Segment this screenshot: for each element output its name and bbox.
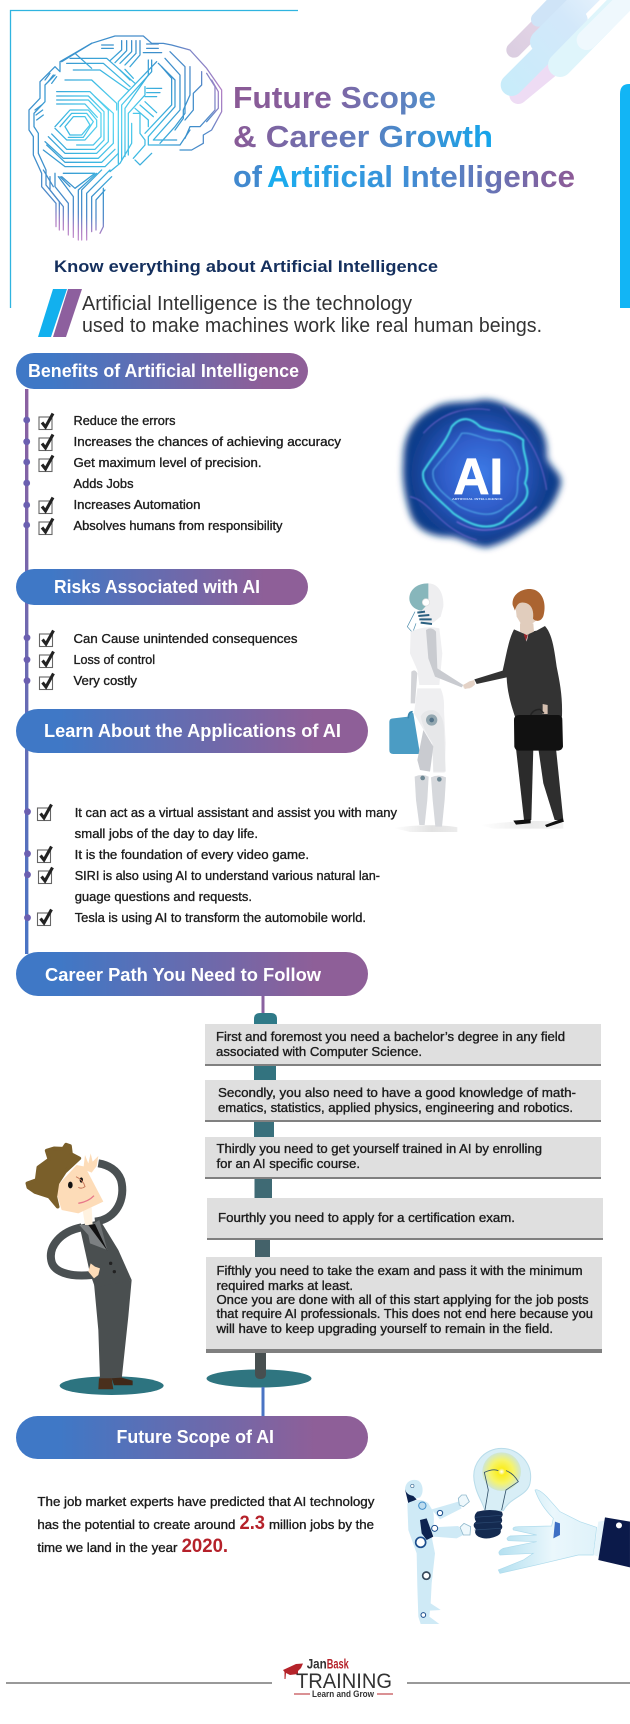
heading: benefits: Benefits of Artificial Intelligence [28,360,299,381]
timeline vertical line [25,389,28,954]
step 3 box: for an AI specific course. [216,1157,360,1171]
step 5 box: that require AI professionals. This does not end here because you [216,1307,593,1321]
light bulb [474,1448,531,1539]
heading: risks [16,569,308,605]
connector: career heading to pole [262,996,264,1014]
panel: applications list: It is the foundation of every video game. [75,847,309,862]
title line 1: Future Scope [233,81,436,115]
logo: JanBask Training: Learn and Grow [312,1689,375,1700]
logo: JanBask Training [283,1657,393,1700]
subtitle: Know everything about Artificial Intelligence [54,257,438,276]
hand [498,1490,630,1573]
stat: 2020: 2020. [182,1535,228,1557]
businessman [463,589,564,827]
panel: risks list: Very costly [74,673,138,688]
icon: circuit brain [29,36,222,240]
signpost base [206,1370,312,1388]
panel: applications list: Tesla is using AI to transform the automobile world. [75,910,366,925]
title line 3 highlight: Artificial Intelligence [267,160,575,194]
step 5 box [206,1257,602,1353]
robot [405,1480,471,1624]
future scope text block: million jobs by the [269,1517,374,1532]
signpost pole [254,1013,277,1379]
shadow right [480,821,563,829]
logo: JanBask Training: Bask [327,1657,349,1672]
intro text: Artificial Intelligence is the technology [82,293,412,315]
step 2 box: Secondly, you also need to have a good knowledge of math- [218,1086,576,1100]
decorative frame: top and left line [10,10,298,308]
panel: benefits list: Absolves humans from responsibility [74,518,283,533]
step 2 box: ematics, statistics, applied physics, engineering and robotics. [218,1101,573,1115]
heading: applications: Learn About the Applications of AI [44,720,341,741]
intro text: used to make machines work like real human beings. [82,315,542,337]
top-right pastel stripes [512,0,630,95]
step 1 box: First and foremost you need a bachelor’s degree in any field [216,1030,565,1044]
step 5 box: Fifthly you need to take the exam and pass it with the minimum [216,1264,582,1278]
future scope text block: has the potential to create around [37,1517,235,1532]
logo: JanBask Training: Jan [307,1657,327,1672]
title [233,81,575,194]
panel: benefits list: Increases the chances of achieving accuracy [74,434,342,449]
heading: risks: Risks Associated with AI [54,576,260,597]
robot [389,583,474,827]
icon: graduation cap [283,1664,303,1679]
panel: benefits list: Reduce the errors [74,413,176,428]
title line 3: of [233,160,263,194]
panel: risks list: Can Cause unintended consequences [74,631,298,646]
panel: risks list: Loss of control [74,652,155,667]
future scope text block: time we land in the year [37,1540,178,1555]
illustration: robot, light bulb and human hand [405,1448,630,1624]
icon: AI blob [403,400,561,547]
step 3 box: Thirdly you need to get yourself trained in AI by enrolling [216,1142,542,1156]
illustration: robot and businessman handshake [389,583,564,832]
step 4 box: Fourthly you need to apply for a certification exam. [218,1211,515,1225]
heading: benefits [16,353,308,389]
panel: benefits list: Get maximum level of precision. [74,455,262,470]
panel: benefits list: Adds Jobs [74,476,134,491]
panel: applications list: guage questions and requests. [75,889,252,904]
future scope text block: The job market experts have predicted that AI technology [37,1494,375,1509]
panel: applications list: SIRI is also using AI to understand various natural lan- [75,868,380,883]
panel: risks list [24,630,298,690]
heading: career path: Career Path You Need to Follow [45,964,322,985]
step 1 box: associated with Computer Science. [216,1045,422,1059]
panel: benefits list [23,413,342,534]
icon: double slash [38,289,82,337]
step 1 box [205,1024,601,1066]
redraw pole bottom over base [255,1362,266,1379]
footer rule right [407,1682,630,1684]
panel: applications list: It can act as a virtual assistant and assist you with many [75,805,397,820]
title line 2: & Career Growth [233,120,493,154]
step 3 box [205,1137,601,1179]
heading: career path [16,952,368,996]
stat: 2.3 million: 2.3 [240,1512,265,1534]
heading: future scope: Future Scope of AI [116,1426,274,1447]
step 5 box: Once you are done with all of this start applying for the job posts [216,1293,588,1307]
illustration: thinking man in suit [27,1145,164,1395]
heading: future scope [16,1416,368,1459]
footer rule left [6,1682,272,1684]
panel: benefits list: Increases Automation [74,497,200,512]
step 2 box [205,1080,601,1122]
heading: applications [16,709,368,753]
panel: applications list: small jobs of the day to day life. [75,826,258,841]
panel: applications list [24,804,397,926]
connector: pole to future scope heading [262,1387,264,1417]
icon: AI blob: ARTIFICIAL INTELLIGENCE [452,497,503,501]
right cyan edge bar [620,84,630,308]
future scope text block [37,1494,375,1557]
step 5 box: will have to keep upgrading yourself to remain in the field. [215,1322,553,1336]
logo: JanBask Training: TRAINING [296,1670,392,1693]
ground shadows [393,825,457,832]
step 5 box: required marks at least. [216,1279,353,1293]
icon: AI blob: AI [453,448,503,505]
step 4 box [207,1198,603,1240]
intro text [82,293,542,337]
